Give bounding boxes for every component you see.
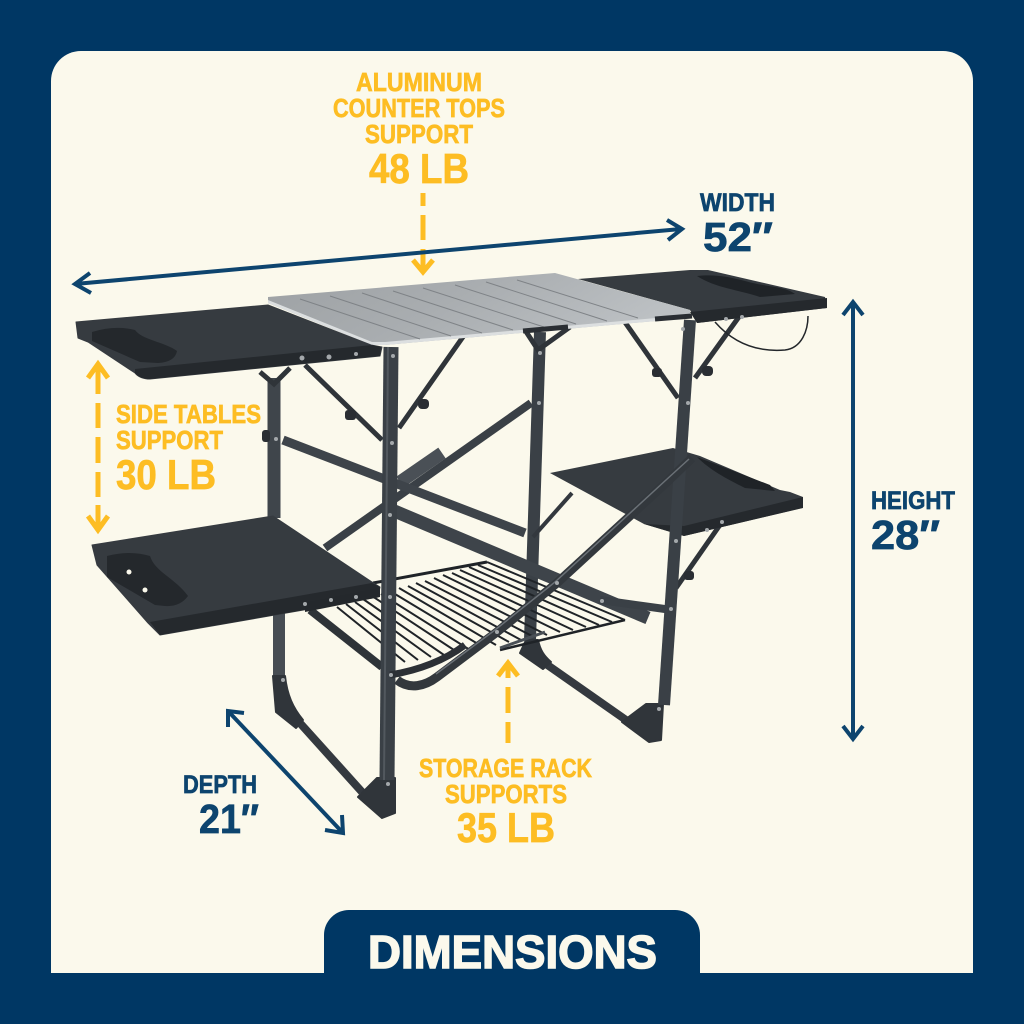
title tab: DIMENSIONS bbox=[368, 926, 657, 978]
rivets bbox=[274, 315, 744, 786]
label: depth: 21″ bbox=[199, 796, 259, 842]
arrow: depth bbox=[228, 711, 343, 833]
label: width: 52″ bbox=[703, 214, 773, 260]
cross braces bbox=[283, 403, 672, 667]
label: aluminum counter tops bbox=[333, 67, 505, 192]
label: storage rack: STORAGE RACK bbox=[419, 753, 592, 783]
title tab bbox=[324, 910, 700, 978]
arrow: height bbox=[843, 302, 863, 739]
product photo: folding camp kitchen table bbox=[76, 270, 827, 818]
label: height: 28″ bbox=[871, 512, 940, 558]
arrow: width bbox=[75, 220, 682, 293]
label: aluminum counter tops: COUNTER TOPS bbox=[333, 93, 505, 123]
label: side tables: 30 LB bbox=[116, 451, 216, 498]
right shelf bbox=[550, 448, 803, 536]
label: storage rack bbox=[419, 753, 592, 851]
front legs bbox=[384, 320, 690, 780]
label: side tables: SIDE TABLES bbox=[116, 399, 261, 429]
label: aluminum counter tops: SUPPORT bbox=[365, 119, 473, 149]
storage wire rack bbox=[337, 562, 625, 662]
bungee cord bbox=[715, 316, 808, 350]
curved tube frame bbox=[390, 458, 692, 686]
label: storage rack: SUPPORTS bbox=[445, 779, 567, 809]
rear legs and side rails bbox=[274, 332, 626, 792]
left side table top bbox=[76, 305, 382, 379]
arrow: side table clearance bbox=[88, 364, 108, 530]
label: storage rack: 35 LB bbox=[457, 804, 555, 851]
label: side tables bbox=[116, 399, 261, 498]
right side table top bbox=[578, 270, 827, 323]
label: width: WIDTH bbox=[700, 189, 775, 217]
label: side tables: SUPPORT bbox=[116, 425, 223, 455]
arrow: counter top load bbox=[413, 193, 433, 272]
feet bbox=[273, 640, 663, 818]
label: width bbox=[700, 189, 775, 260]
arrow: storage rack load bbox=[498, 663, 518, 743]
label: height: HEIGHT bbox=[871, 487, 955, 515]
label: depth: DEPTH bbox=[183, 771, 257, 799]
label: aluminum counter tops: 48 LB bbox=[369, 145, 469, 192]
aluminum counter top bbox=[268, 273, 692, 345]
label: aluminum counter tops: ALUMINUM bbox=[356, 67, 482, 97]
label: depth bbox=[183, 771, 259, 842]
lower left side table bbox=[92, 516, 380, 635]
small support struts and knobs bbox=[260, 314, 741, 588]
label: height bbox=[871, 487, 955, 558]
